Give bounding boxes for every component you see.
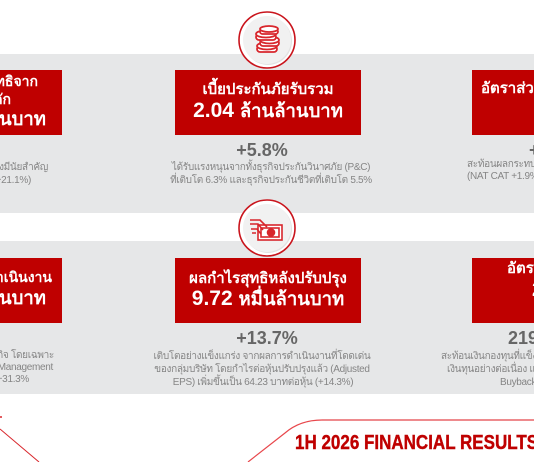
red box xyxy=(0,258,62,323)
card: bottom left xyxy=(0,258,62,385)
card: bottom centre xyxy=(154,258,370,388)
icon: hand with banknote xyxy=(238,199,296,257)
description line three: EPS) เพิ่มขึ้นเป็น 64.23 บาทต่อหุ้น (+14.3%) xyxy=(173,377,353,388)
card: top centre xyxy=(170,70,372,186)
change figure: +13.7% xyxy=(236,328,298,348)
card: bottom right xyxy=(441,258,534,388)
red box xyxy=(472,258,534,323)
panel: top row background xyxy=(0,54,534,213)
red box xyxy=(472,70,534,135)
card: top right xyxy=(467,70,534,182)
red box xyxy=(0,70,62,135)
description line one: ได้รับแรงหนุนจากทั้งธุรกิจประกันวินาศภัย (P&C) xyxy=(172,162,370,173)
description line one: เติบโตอย่างแข็งแกร่ง จากผลการดำเนินงานที่โดดเด่น xyxy=(154,351,370,362)
panel: bottom row background xyxy=(0,241,534,394)
description line two: ที่เติบโต 6.3% และธุรกิจประกันชีวิตที่เติบโต 5.5% xyxy=(170,175,372,186)
heading: ผลกำไรสุทธิหลังปรับปรุง xyxy=(189,270,347,287)
red box xyxy=(175,70,361,135)
decorative title frame xyxy=(0,416,534,462)
value: 2.04 ล้านล้านบาท xyxy=(193,99,343,122)
red box xyxy=(175,258,361,323)
description line two: ของกลุ่มบริษัท โดยกำไรต่อหุ้นปรับปรุงแล้ว (Adjusted xyxy=(154,364,370,375)
change figure: +5.8% xyxy=(236,140,288,160)
heading: เบี้ยประกันภัยรับรวม xyxy=(202,81,334,98)
value: 9.72 หมื่นล้านบาท xyxy=(192,287,344,310)
icon: coin stack xyxy=(238,11,296,69)
card: top left xyxy=(0,70,62,186)
title: 1H 2026 financial results: 1H 2026 FINANCIAL RESULTS xyxy=(295,432,534,454)
